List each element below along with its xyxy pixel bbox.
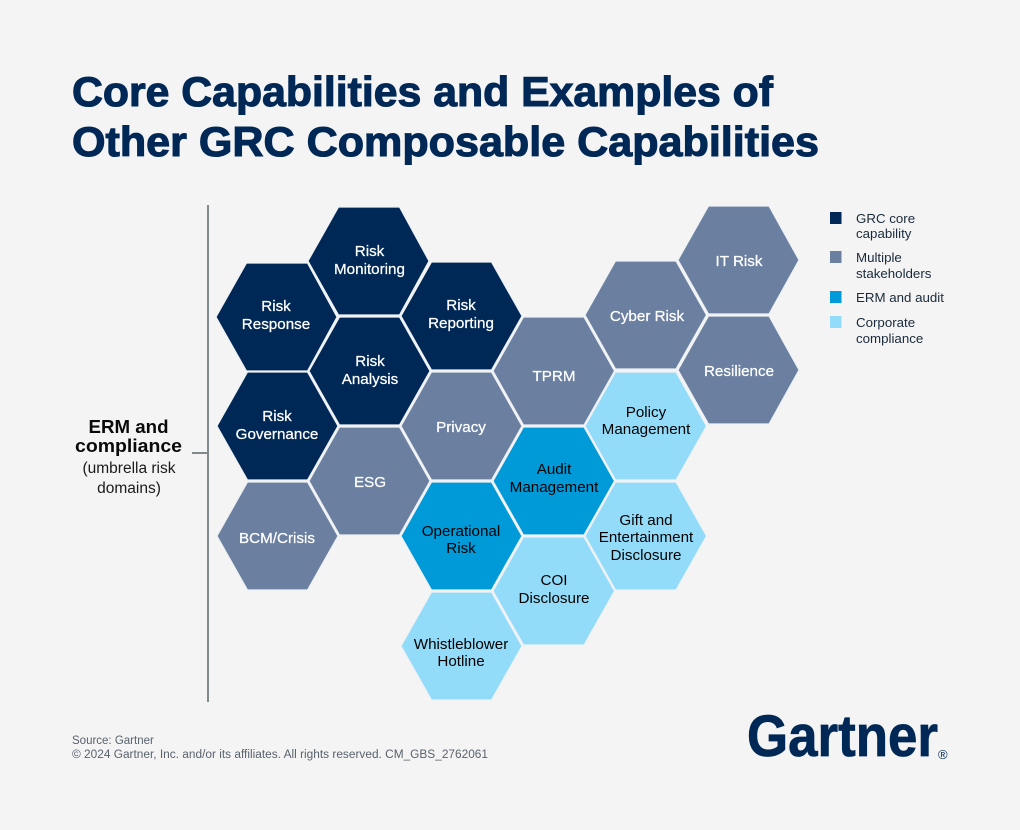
hexagon: Policy Management: Policy — [626, 404, 667, 421]
legend item: GRC core capability — [830, 211, 915, 241]
hexagon: Risk Analysis: Risk — [355, 353, 385, 370]
hexagon: Cyber Risk — [585, 261, 706, 369]
hexagon: Privacy — [401, 372, 522, 480]
hexagon: BCM/Crisis — [217, 482, 338, 590]
hexagon: Gift and Entertainment Disclosure: Gift and — [619, 512, 673, 529]
hexagon: Whistleblower Hotline: Whistleblower — [414, 636, 508, 653]
legend item: Corporate compliance: Corporate — [856, 315, 915, 330]
hexagon: Gift and Entertainment Disclosure — [585, 482, 706, 590]
legend item: Multiple stakeholders: stakeholders — [856, 266, 932, 281]
hexagon: Operational Risk: Risk — [446, 540, 476, 557]
hexagon: Operational Risk — [401, 482, 522, 590]
label: ERM and compliance: domains) — [97, 480, 161, 497]
hexagon: Operational Risk: Operational — [422, 523, 500, 540]
legend — [830, 211, 944, 346]
hexagon: Risk Reporting — [401, 262, 522, 370]
hexagon: Resilience: Resilience — [704, 363, 774, 380]
hexagon: Audit Management — [493, 427, 614, 535]
hexagon: Privacy: Privacy — [436, 419, 486, 436]
hexagon: COI Disclosure: Disclosure — [519, 590, 589, 607]
label: ERM and compliance — [75, 417, 182, 497]
hexagon: Risk Reporting: Risk — [446, 297, 476, 314]
hexagon: Whistleblower Hotline — [401, 592, 522, 700]
title — [72, 68, 819, 165]
legend item: GRC core capability: GRC core — [856, 211, 915, 226]
hexagon: Risk Response: Response — [242, 316, 310, 333]
hexagon: Risk Analysis — [309, 317, 430, 425]
hexagon: Risk Response — [216, 263, 337, 371]
hexagon: Gift and Entertainment Disclosure: Disclosure — [611, 547, 681, 564]
hexagon: Whistleblower Hotline: Hotline — [437, 653, 485, 670]
hexagon: Audit Management: Management — [510, 479, 599, 496]
hexagon: Risk Reporting: Reporting — [428, 315, 494, 332]
hexagon: Risk Governance: Risk — [262, 408, 292, 425]
label: ERM and compliance: compliance — [75, 436, 182, 456]
hexagon: IT Risk: IT Risk — [716, 253, 763, 270]
hexagon: Gift and Entertainment Disclosure: Entertainment — [599, 529, 694, 546]
hexagon: TPRM — [493, 317, 614, 425]
legend item: Multiple stakeholders — [830, 250, 932, 281]
Gartner logo: Gartner — [747, 704, 938, 769]
legend item: ERM and audit: ERM and audit — [856, 290, 944, 305]
hexagon: Risk Response: Risk — [261, 298, 291, 315]
hexagon: Policy Management — [585, 372, 706, 480]
Gartner logo: ® — [938, 747, 948, 762]
hexagon: ESG — [309, 427, 430, 535]
hexagon grid — [216, 206, 799, 700]
legend item: Multiple stakeholders: Multiple — [856, 250, 902, 265]
title: Core Capabilities and Examples of — [72, 68, 774, 115]
hexagon: COI Disclosure: COI — [540, 572, 568, 589]
hexagon: Risk Monitoring: Monitoring — [334, 261, 405, 278]
label: ERM and compliance: (umbrella risk — [82, 460, 176, 477]
legend item: GRC core capability: capability — [856, 226, 912, 241]
hexagon: Risk Monitoring — [308, 207, 429, 315]
hexagon: Risk Monitoring: Risk — [355, 243, 385, 260]
hexagon: Policy Management: Management — [602, 421, 691, 438]
legend item: Corporate compliance: compliance — [856, 331, 923, 346]
hexagon: BCM/Crisis: BCM/Crisis — [239, 530, 315, 547]
hexagon: Risk Governance: Governance — [236, 426, 318, 443]
hexagon: Audit Management: Audit — [537, 461, 572, 478]
hexagon: COI Disclosure — [493, 537, 614, 645]
hexagon: IT Risk — [678, 206, 799, 314]
source footer: Source: Gartner — [72, 735, 154, 747]
bracket line — [192, 205, 208, 702]
label: ERM and compliance: ERM and — [88, 417, 168, 437]
title: Other GRC Composable Capabilities — [72, 118, 819, 165]
hexagon: TPRM: TPRM — [532, 368, 576, 385]
source footer: © 2024 Gartner, Inc. and/or its affiliates. All rights reserved. CM_GBS_2762061 — [72, 749, 488, 761]
hexagon: Risk Governance — [217, 372, 338, 480]
hexagon: Risk Analysis: Analysis — [342, 371, 399, 388]
hexagon: Cyber Risk: Cyber Risk — [610, 308, 685, 325]
hexagon: Resilience — [678, 316, 799, 424]
hexagon: ESG: ESG — [354, 474, 386, 491]
source footer — [72, 735, 488, 761]
legend item: Corporate compliance — [830, 315, 923, 346]
